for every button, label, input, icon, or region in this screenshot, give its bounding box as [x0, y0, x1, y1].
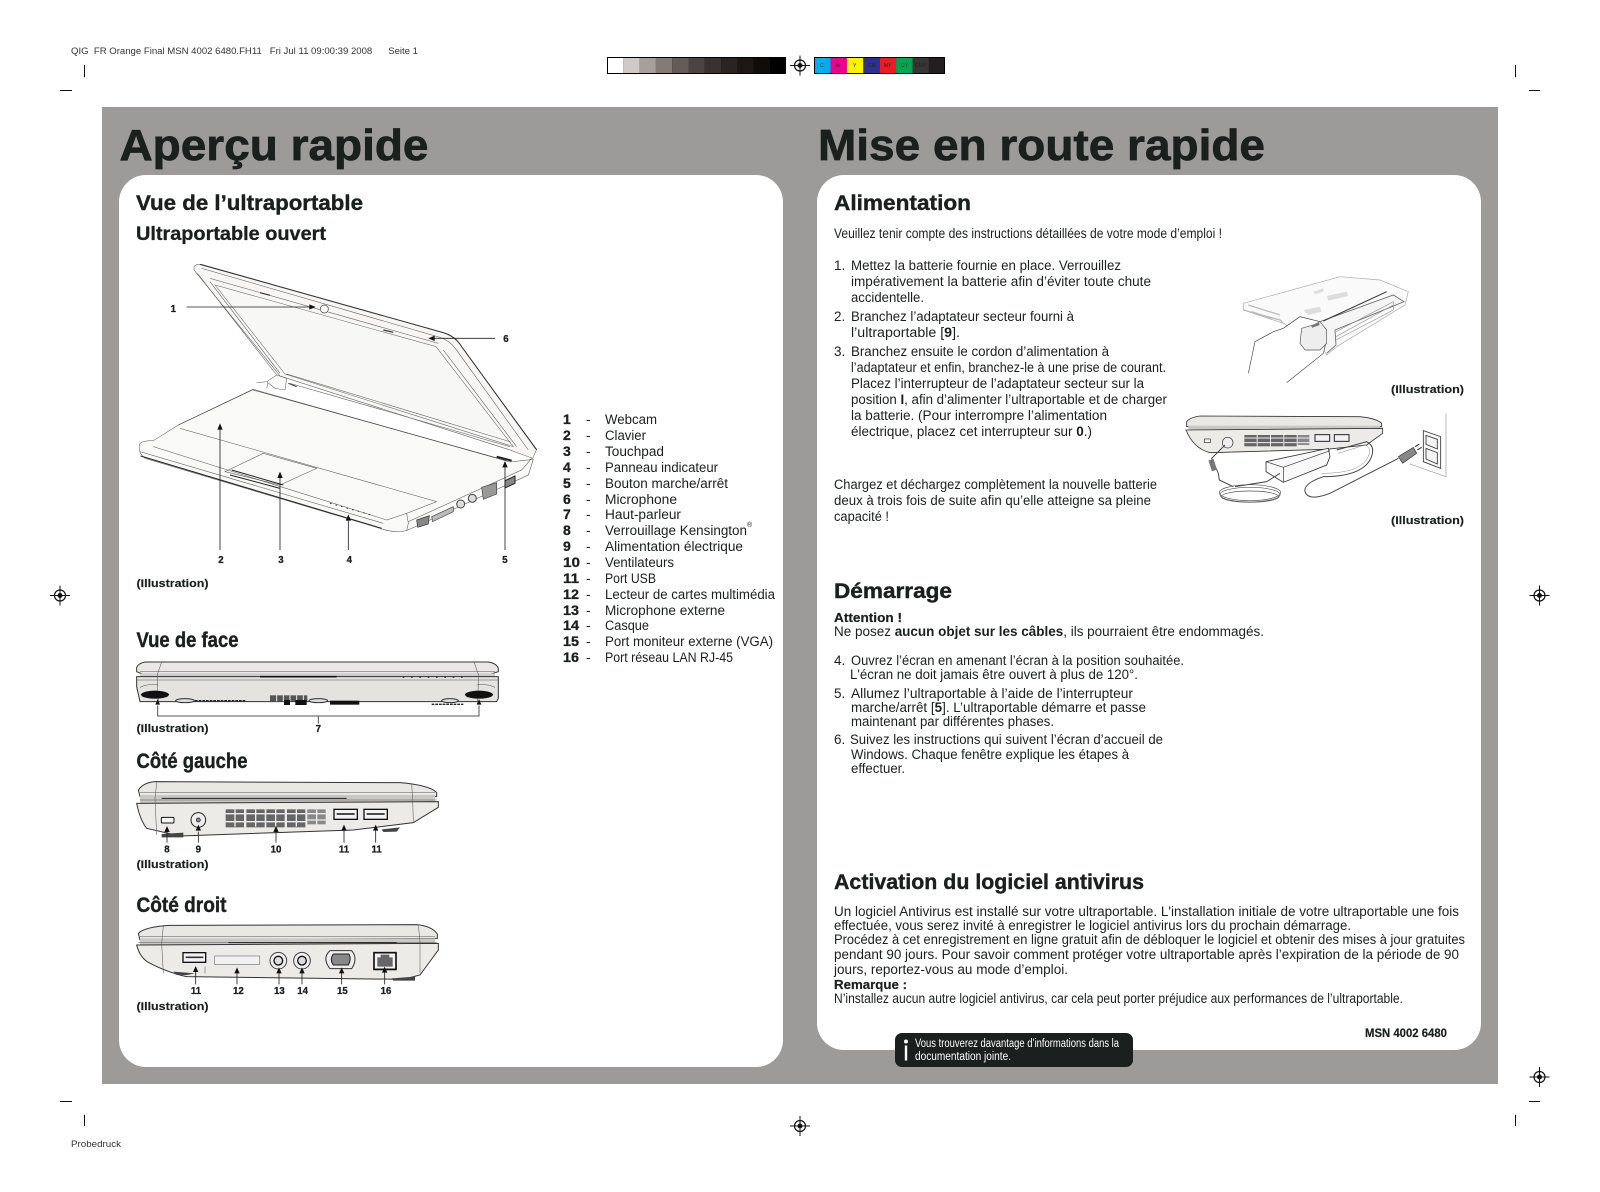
- illustration: inserting the battery: [1243, 277, 1408, 383]
- antivirus text: [833, 904, 1465, 1006]
- antivirus text: N’installez aucun autre logiciel antivirus, car cela peut porter préjudice aux performances de l’ultraportable.: [834, 991, 1403, 1006]
- steps 4 to 6: effectuer.: [851, 761, 905, 776]
- legend: numbered components: 16: [563, 649, 579, 665]
- antivirus text: Procédez à cet enregistrement en ligne gratuit afin de débloquer le logiciel et obtenir des mises à jour gratuites: [834, 932, 1465, 947]
- colour calibration strip: C: [820, 63, 824, 69]
- steps 1 to 3: 1.: [834, 258, 845, 273]
- colour calibration strip: [814, 57, 945, 74]
- legend: numbered components: Panneau indicateur: [605, 460, 718, 475]
- legend: numbered components: -: [586, 444, 590, 459]
- legend: numbered components: Clavier: [605, 428, 646, 443]
- illustration: left side view: 9: [196, 844, 202, 855]
- steps 4 to 6: maintenant par différentes phases.: [851, 714, 1054, 729]
- steps 1 to 3: Placez l’interrupteur de l’adaptateur secteur sur la: [851, 376, 1144, 391]
- illustration: right side view: 13: [274, 986, 285, 997]
- heading: Ultraportable ouvert: Ultraportable ouvert: [136, 223, 327, 245]
- illustration: connecting the power adapter: [1186, 413, 1446, 502]
- steps 1 to 3: Branchez ensuite le cordon d’alimentation à: [851, 344, 1109, 359]
- steps 1 to 3: l’ultraportable [ 9].: [851, 325, 960, 340]
- legend: numbered components: Port réseau LAN RJ-45: [605, 650, 733, 665]
- antivirus text: Remarque :: [834, 977, 907, 992]
- registration mark: bottom: [790, 1116, 810, 1136]
- legend: numbered components: 8: [563, 522, 571, 538]
- legend: numbered components: -: [586, 507, 590, 522]
- legend: numbered components: 12: [563, 586, 579, 602]
- callout text: [915, 1038, 1119, 1063]
- illustration: right side view: 11: [191, 986, 202, 997]
- gray background sheet: [102, 107, 1498, 1084]
- legend: numbered components: 3: [563, 443, 571, 459]
- caption: illustration 1: (Illustration): [136, 578, 209, 590]
- steps 1 to 3: 2.: [834, 309, 845, 324]
- legend: numbered components: Microphone: [605, 492, 677, 507]
- illustration: left side view: 8: [164, 844, 170, 855]
- steps 4 to 6: L'écran ne doit jamais être ouvert à plus de 120°.: [850, 667, 1138, 682]
- steps 4 to 6: 5.: [834, 686, 845, 701]
- footer note: Probedruck: Probedruck: [71, 1139, 122, 1149]
- legend: numbered components: -: [586, 634, 590, 649]
- registration mark: top: [790, 56, 810, 76]
- colour calibration strip: M: [836, 63, 840, 69]
- heading: Alimentation: Alimentation: [834, 192, 971, 215]
- panel: quick start: [817, 175, 1481, 1050]
- title: Mise en route rapide: Mise en route rapide: [818, 121, 1265, 170]
- legend: numbered components: 1: [563, 411, 571, 427]
- steps 4 to 6: Windows. Chaque fenêtre explique les étapes à: [851, 747, 1129, 762]
- illustration: left side view: 11: [372, 844, 382, 855]
- registration mark: right: [1530, 586, 1550, 606]
- illustration: open laptop with callouts: 2: [218, 555, 224, 566]
- illustration: right side view: 16: [381, 986, 392, 997]
- registration mark: lower right: [1530, 1067, 1550, 1087]
- antivirus text: Un logiciel Antivirus est installé sur votre ultraportable. L'installation initiale de votre ultraportable une fois: [834, 904, 1459, 919]
- legend: numbered components: 6: [563, 491, 571, 507]
- legend: numbered components: ®: [747, 521, 753, 529]
- callout text: Vous trouverez davantage d’informations dans la: [915, 1038, 1119, 1050]
- legend: numbered components: 2: [563, 427, 571, 443]
- steps 1 to 3: la batterie. (Pour interrompre l’alimentation: [851, 408, 1107, 423]
- warning note: Ne posez aucun objet sur les câbles, ils pourraient être endommagés.: [834, 624, 1264, 639]
- legend: numbered components: 11: [563, 570, 579, 586]
- legend: numbered components: Touchpad: [605, 444, 664, 459]
- legend: numbered components: Port USB: [605, 571, 656, 586]
- legend: numbered components: Verrouillage Kensington: [605, 523, 747, 538]
- legend: numbered components: Lecteur de cartes multimédia: [605, 587, 775, 602]
- heading: Côté gauche: Côté gauche: [136, 750, 248, 773]
- panel: laptop overview: [119, 175, 783, 1067]
- battery charge note: [834, 477, 1157, 524]
- steps 4 to 6: 6.: [834, 732, 845, 747]
- legend: numbered components: -: [586, 492, 590, 507]
- legend: numbered components: Haut-parleur: [605, 507, 681, 522]
- caption: battery illustration: (Illustration): [1391, 384, 1464, 396]
- grayscale calibration strip: [607, 57, 786, 74]
- illustration: open laptop with callouts: 6: [503, 334, 509, 345]
- caption: illustration 2: (Illustration): [136, 723, 209, 735]
- warning note: [834, 610, 1264, 639]
- steps 4 to 6: 4.: [834, 653, 845, 668]
- legend: numbered components: -: [586, 587, 590, 602]
- steps 1 to 3: électrique, placez cet interrupteur sur 0.): [851, 424, 1092, 439]
- colour calibration strip: MY: [884, 63, 892, 69]
- legend: numbered components: 5: [563, 475, 571, 491]
- legend: numbered components: Alimentation électrique: [605, 539, 743, 554]
- steps 4 to 6: [834, 653, 1184, 776]
- legend: numbered components: -: [586, 571, 590, 586]
- illustration: open laptop with callouts: 5: [502, 555, 508, 566]
- steps 4 to 6: marche/arrêt [5]. L’ultraportable démarre et passe: [851, 700, 1146, 715]
- legend: numbered components: 4: [563, 459, 571, 475]
- legend: numbered components: -: [586, 476, 590, 491]
- steps 4 to 6: Suivez les instructions qui suivent l’écran d’accueil de: [850, 732, 1163, 747]
- legend: numbered components: 9: [563, 538, 571, 554]
- illustration: left side view: 11: [339, 844, 350, 855]
- illustration: front view: [137, 662, 498, 735]
- illustration: right side view: 15: [337, 986, 348, 997]
- steps 1 to 3: 3.: [834, 344, 845, 359]
- legend: numbered components: 15: [563, 633, 579, 649]
- warning note: Attention !: [834, 610, 902, 625]
- legend: numbered components: 10: [563, 554, 580, 570]
- legend: numbered components: Ventilateurs: [605, 555, 674, 570]
- heading: Côté droit: Côté droit: [136, 894, 227, 917]
- colour calibration strip: CM: [868, 63, 876, 69]
- steps 1 to 3: accidentelle.: [851, 290, 924, 305]
- legend: numbered components: -: [586, 618, 590, 633]
- colour calibration strip: K: [935, 63, 939, 69]
- colour calibration strip: CMY: [915, 63, 927, 69]
- title: Aperçu rapide: Aperçu rapide: [120, 121, 428, 170]
- illustration: right side view: [137, 925, 438, 997]
- illustration: left side view: [137, 782, 438, 855]
- illustration: right side view: 14: [297, 986, 309, 997]
- caption: illustration 3: (Illustration): [136, 859, 209, 871]
- legend: numbered components: Port moniteur externe (VGA): [605, 634, 773, 649]
- battery charge note: Chargez et déchargez complètement la nouvelle batterie: [834, 477, 1157, 492]
- legend: numbered components: -: [586, 603, 590, 618]
- legend: numbered components: 7: [563, 506, 571, 522]
- heading: Vue de l'ultraportable: Vue de l’ultraportable: [136, 192, 363, 215]
- callout text: documentation jointe.: [915, 1051, 1011, 1063]
- caption: adapter illustration: (Illustration): [1391, 515, 1464, 527]
- legend: numbered components: -: [586, 428, 590, 443]
- illustration: open laptop with callouts: 3: [278, 555, 284, 566]
- legend: numbered components: -: [586, 412, 590, 427]
- caption: illustration 4: (Illustration): [136, 1001, 209, 1013]
- heading: Activation du logiciel antivirus: Activation du logiciel antivirus: [834, 871, 1144, 894]
- legend: numbered components: 13: [563, 602, 579, 618]
- legend: numbered components: -: [586, 460, 590, 475]
- steps 1 to 3: Branchez l’adaptateur secteur fourni à: [851, 309, 1074, 324]
- antivirus text: effectuée, vous serez invité à enregistrer le logiciel antivirus lors du prochain démarrage.: [834, 918, 1351, 933]
- illustration: front view: 7: [316, 724, 321, 735]
- model number: MSN 4002 6480: [1365, 1026, 1447, 1040]
- steps 1 to 3: impérativement la batterie afin d’éviter toute chute: [851, 274, 1151, 289]
- illustration: open laptop with callouts: 4: [347, 555, 353, 566]
- colour calibration strip: CY: [901, 63, 909, 69]
- legend: numbered components: Bouton marche/arrêt: [605, 476, 728, 491]
- intro line: Veuillez tenir compte des instructions détaillées de votre mode d’emploi !: [834, 226, 1222, 241]
- colour calibration strip: Y: [853, 63, 857, 69]
- illustration: right side view: 12: [233, 986, 244, 997]
- antivirus text: pendant 90 jours. Pour savoir comment protéger votre ultraportable après l’expiration de la période de 90: [834, 947, 1459, 962]
- icon: info: [904, 1040, 908, 1060]
- legend: numbered components: -: [586, 523, 590, 538]
- legend: numbered components: 14: [563, 617, 579, 633]
- legend: numbered components: [563, 411, 775, 665]
- steps 4 to 6: Allumez l’ultraportable à l’aide de l’interrupteur: [851, 686, 1134, 701]
- antivirus text: jours, reportez-vous au mode d’emploi.: [833, 962, 1068, 977]
- illustration: open laptop with callouts: 1: [171, 304, 177, 315]
- illustration: open laptop with callouts: [139, 264, 537, 566]
- steps 1 to 3: l’adaptateur et enfin, branchez-le à une prise de courant.: [851, 360, 1166, 375]
- legend: numbered components: Microphone externe: [605, 603, 725, 618]
- info callout: [895, 1033, 1133, 1067]
- legend: numbered components: Webcam: [605, 412, 657, 427]
- legend: numbered components: -: [586, 539, 590, 554]
- registration mark: left: [50, 586, 70, 606]
- steps 1 to 3: position I, afin d’alimenter l’ultraportable et de charger: [851, 392, 1167, 407]
- illustration: left side view: 10: [271, 844, 281, 855]
- heading: Démarrage: Démarrage: [834, 580, 952, 603]
- print job header: QIG FR Orange Final MSN 4002 6480.FH11 Fri Jul 11 09:00:39 2008 Seite 1: [71, 46, 418, 56]
- battery charge note: deux à trois fois de suite afin qu’elle atteigne sa pleine: [834, 493, 1151, 508]
- legend: numbered components: Casque: [605, 618, 649, 633]
- heading: Vue de face: Vue de face: [136, 629, 238, 652]
- legend: numbered components: -: [586, 650, 590, 665]
- battery charge note: capacité !: [834, 509, 889, 524]
- steps 1 to 3: Mettez la batterie fournie en place. Verrouillez: [851, 258, 1121, 273]
- steps 4 to 6: Ouvrez l’écran en amenant l’écran à la position souhaitée.: [851, 653, 1184, 668]
- steps 1 to 3: [834, 258, 1167, 439]
- legend: numbered components: -: [586, 555, 590, 570]
